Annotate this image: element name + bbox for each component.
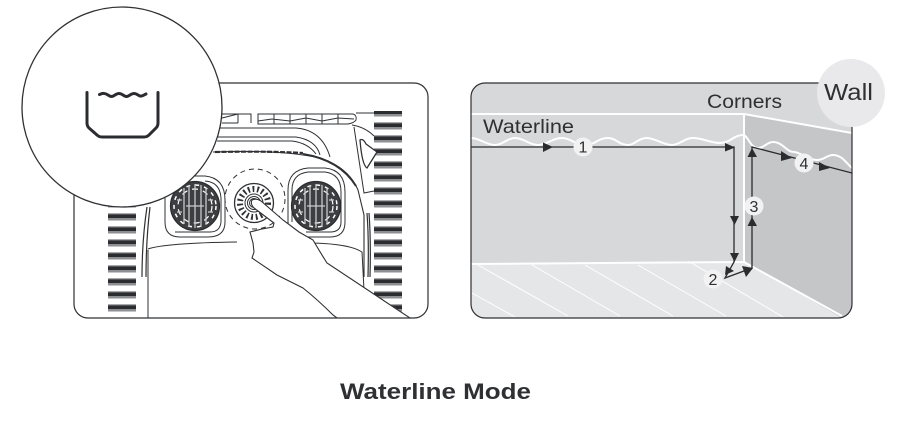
- title: Waterline Mode: [340, 379, 531, 404]
- label: Corners: Corners: [707, 92, 782, 113]
- panel outline: [74, 83, 428, 318]
- hand: [250, 199, 410, 318]
- step numbers: 4: [800, 156, 809, 173]
- magnified circle with waterline icon: [22, 7, 222, 207]
- arrowheads: [543, 142, 830, 277]
- right wall: [744, 114, 852, 318]
- top vent slats: [222, 113, 374, 136]
- water surface wave: [471, 135, 852, 168]
- panel outline: [471, 83, 852, 318]
- floor: [471, 262, 842, 318]
- panel: robot control illustration: [74, 83, 428, 318]
- label: Wall: Wall: [824, 79, 873, 105]
- wall edges: [471, 114, 852, 316]
- side vents: [165, 168, 345, 237]
- step numbers: 1: [579, 140, 588, 156]
- floor tile lines: [472, 262, 783, 317]
- cleaning path lines: [471, 147, 852, 278]
- robot body contours: [142, 127, 374, 318]
- panel: waterline cleaning path diagram: [471, 59, 885, 318]
- right track: [374, 111, 402, 318]
- wall badge: [817, 59, 885, 127]
- step numbers: 2: [709, 272, 718, 289]
- step numbers: 3: [750, 199, 759, 216]
- left track: [108, 206, 136, 312]
- label: Waterline: Waterline: [483, 117, 574, 138]
- center dial with dashed ring: [225, 169, 285, 229]
- step badges: [574, 138, 814, 288]
- icon: waterline tub: [87, 92, 158, 137]
- step numbers: [579, 140, 809, 289]
- latch: [360, 140, 377, 168]
